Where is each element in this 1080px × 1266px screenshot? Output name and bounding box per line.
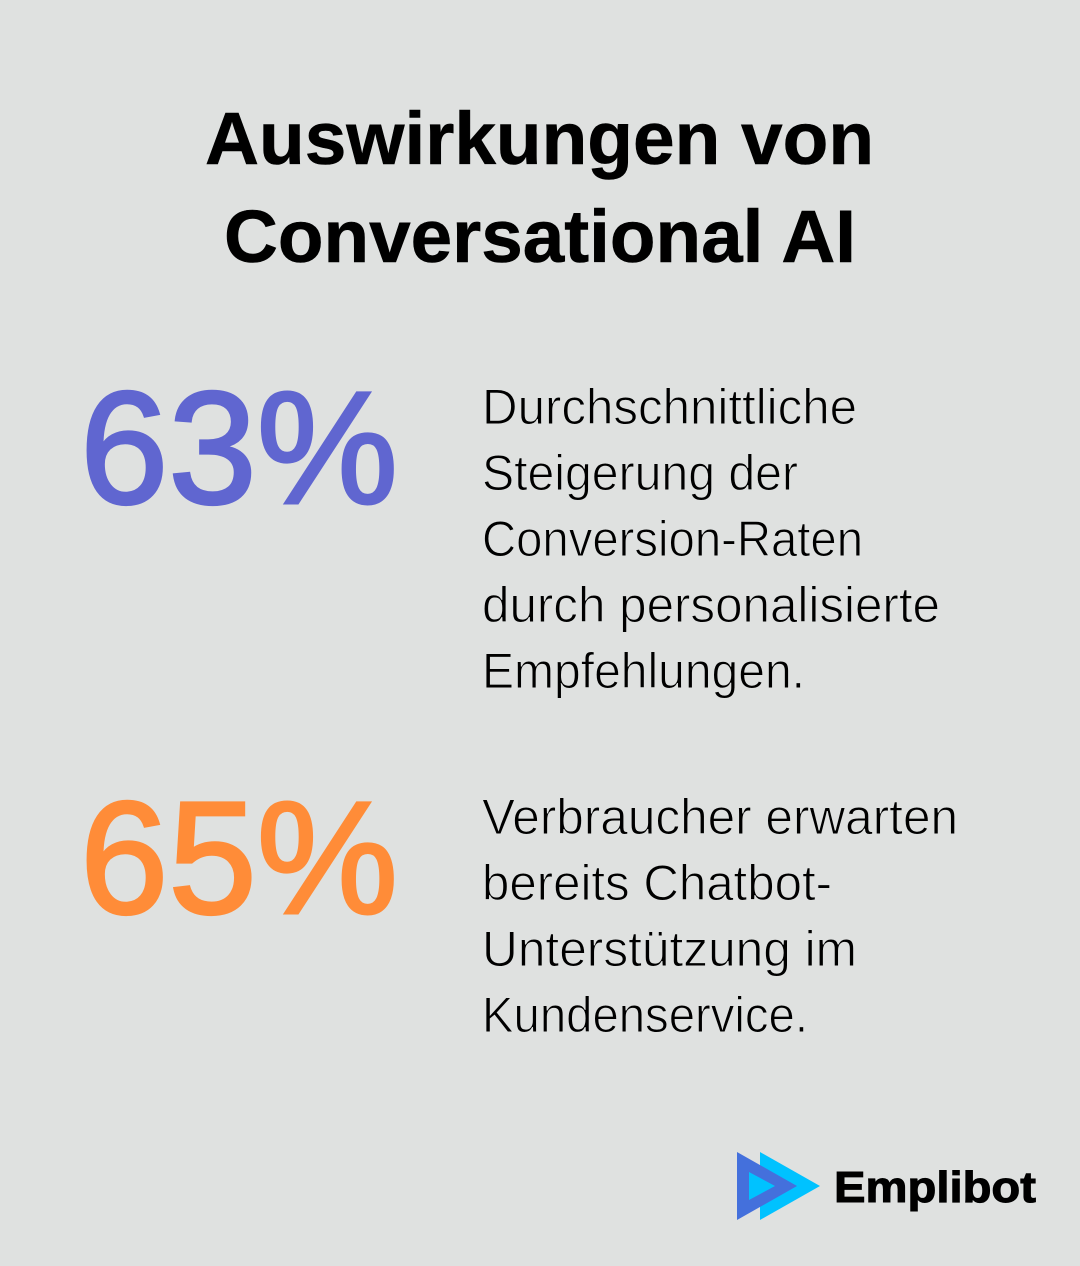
text block: 63% description: Steigerung der bbox=[482, 445, 798, 501]
text block: 65% description: Kundenservice. bbox=[482, 987, 808, 1043]
text block: 63% description: durch personalisierte bbox=[482, 577, 940, 633]
title bbox=[205, 97, 874, 278]
text block: 65% description: bereits Chatbot- bbox=[482, 855, 832, 911]
text block: 65% description: Unterstützung im bbox=[482, 921, 857, 977]
title: Auswirkungen von bbox=[205, 97, 874, 180]
text block: 63% description: Durchschnittliche bbox=[482, 379, 857, 435]
text block: 65% description bbox=[482, 789, 958, 1043]
statistic: 65%: 65% bbox=[80, 768, 398, 947]
text block: 63% description bbox=[482, 379, 940, 699]
statistic: 63%: 63% bbox=[80, 358, 398, 537]
text block: 63% description: Conversion-Raten bbox=[482, 511, 863, 567]
icon: play triangles bbox=[737, 1152, 820, 1220]
text block: 65% description: Verbraucher erwarten bbox=[482, 789, 958, 845]
logo wordmark: Emplibot bbox=[834, 1163, 1036, 1212]
logo: Emplibot bbox=[737, 1152, 1036, 1220]
title: Conversational AI bbox=[224, 195, 856, 278]
text block: 63% description: Empfehlungen. bbox=[482, 643, 805, 699]
